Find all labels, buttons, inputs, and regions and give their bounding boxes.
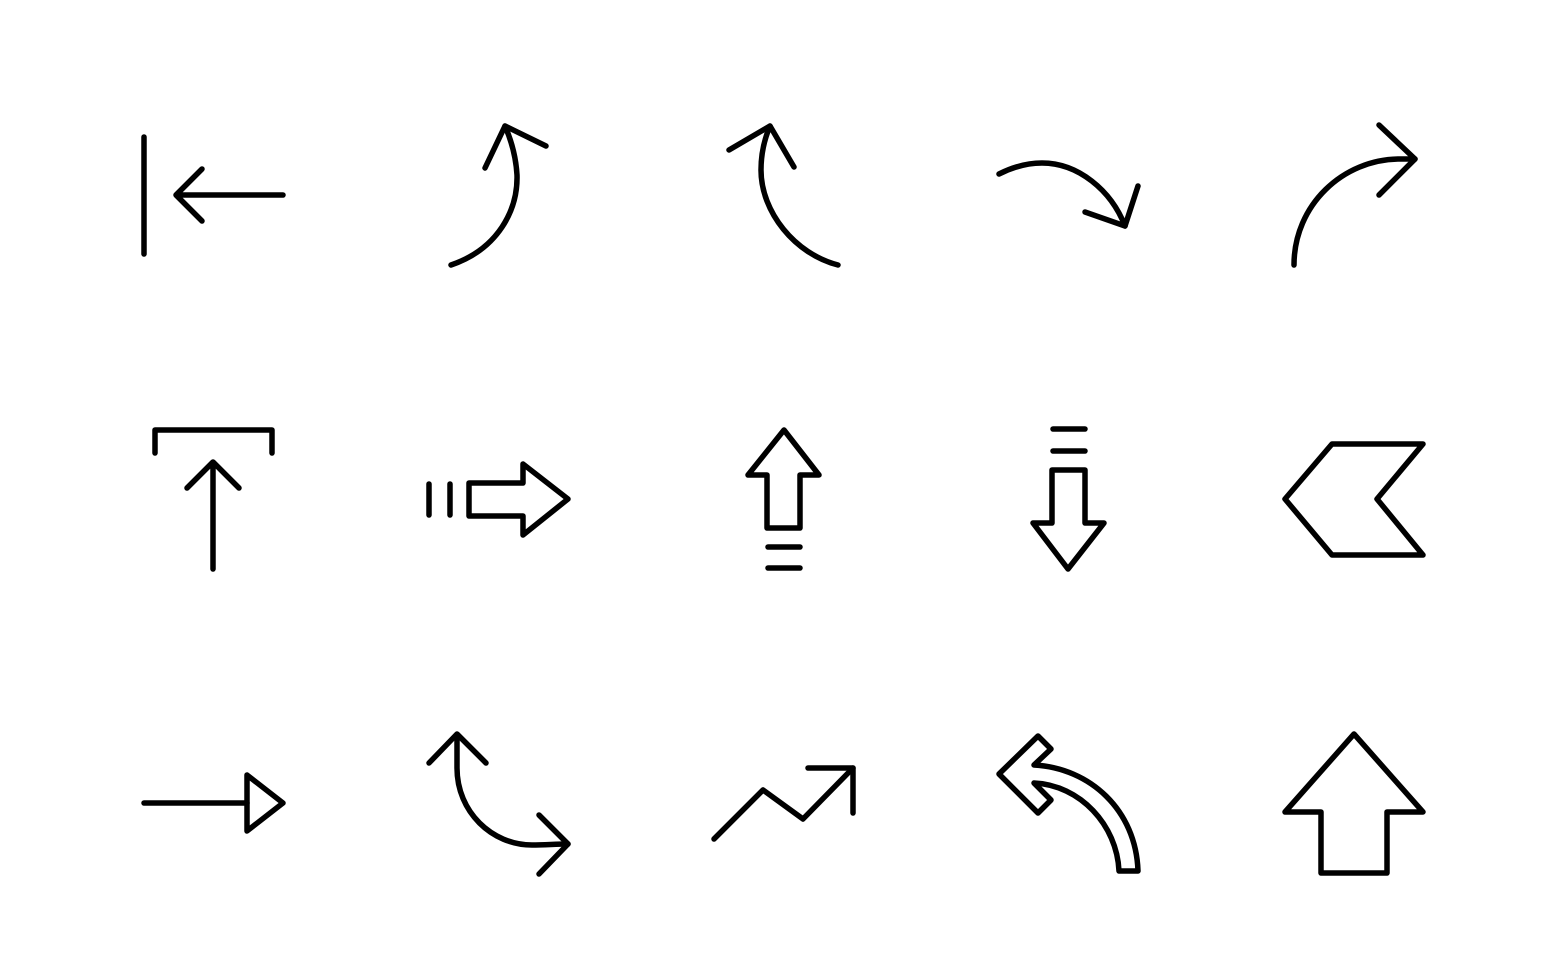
icon: outlined down arrow with lines [1033, 429, 1104, 569]
icon: outlined right arrow with motion lines [429, 464, 568, 535]
icon: curved arrow turning right [1294, 125, 1415, 265]
icon: double-headed curved arrow [429, 734, 568, 874]
icon: curved arrow up right [451, 126, 546, 265]
icon: left chevron arrow [1285, 444, 1423, 555]
icon: right arrow with triangle head [144, 775, 283, 831]
icon: outlined curved back arrow [999, 736, 1138, 871]
icon: up arrow to bracket [155, 430, 272, 569]
icon: outlined up arrow with lines [748, 430, 819, 568]
icon: left arrow to bar [144, 137, 283, 254]
icon: large outlined up arrow [1285, 734, 1423, 873]
icon: curved arrow up left [729, 126, 838, 265]
icon: trending zigzag arrow [714, 768, 853, 839]
icon: curved arrow down right [999, 163, 1138, 226]
